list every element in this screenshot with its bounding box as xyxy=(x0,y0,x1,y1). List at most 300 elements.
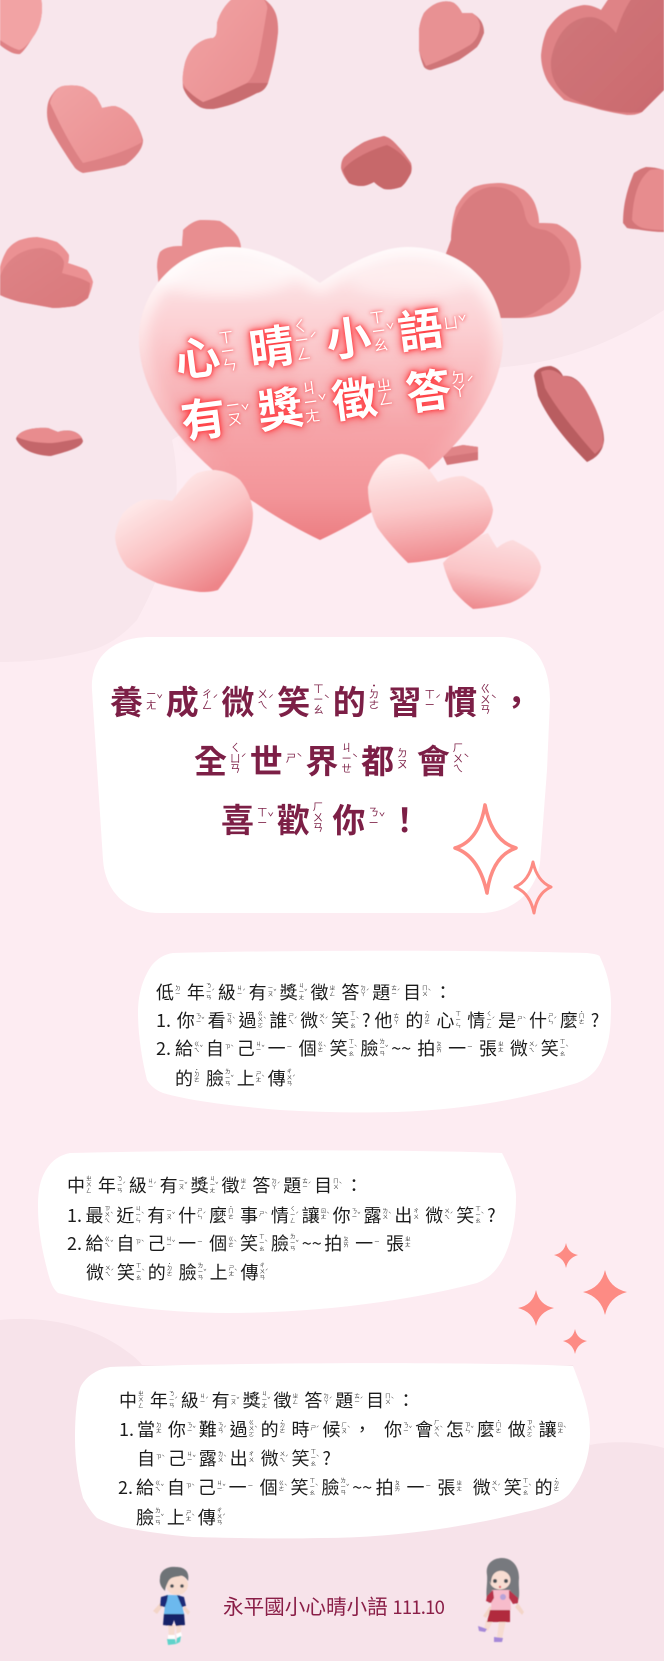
question 2 continued: ˊ xyxy=(292,1073,296,1081)
slogan line 2: ㄉㄡ xyxy=(397,745,408,771)
slogan line 1: ㄒㄧㄠ xyxy=(313,681,324,717)
slogan line 3: ㄋㄧ xyxy=(368,804,379,830)
heading xyxy=(156,979,452,1005)
heart: right edge xyxy=(623,167,664,232)
question 2: ㄍㄜ xyxy=(279,1479,284,1493)
title: 心晴小語有獎徵答: ˇ xyxy=(317,389,328,411)
question 2: ˋ xyxy=(528,1482,532,1490)
slogan line 2: ㄏㄨㄟ xyxy=(453,740,463,776)
question 2: ˋ xyxy=(354,1043,357,1051)
question 1: ˊ xyxy=(294,1015,297,1023)
heading: ˇ xyxy=(304,987,308,995)
heading: ˋ xyxy=(339,1180,342,1188)
heading: 中 xyxy=(119,1387,137,1413)
question 1: ㄌㄨ xyxy=(383,1207,388,1221)
question 2: ˇ xyxy=(161,1482,164,1490)
heart: soft front left xyxy=(115,470,253,592)
heading: ㄊㄧ xyxy=(302,1177,308,1191)
question 2: ㄨㄟ xyxy=(492,1479,497,1493)
question 2: 笑 xyxy=(541,1035,559,1061)
heading: ㄧㄡ xyxy=(231,1392,236,1406)
heading: ： xyxy=(397,1387,415,1413)
question 1: 笑 xyxy=(331,1007,349,1033)
heart: upper left xyxy=(47,85,143,173)
icon: girl character xyxy=(478,1557,524,1642)
question 2: 笑 xyxy=(329,1035,347,1061)
heading: ㄊㄧ xyxy=(391,984,397,998)
question 1: ㄍㄨㄛ xyxy=(257,1009,263,1029)
question 2: ㄧ xyxy=(197,1238,203,1246)
heading: ㄇㄨ xyxy=(333,1177,339,1191)
question 1: ˋ xyxy=(347,1424,350,1432)
question 2: ˇ xyxy=(110,1238,113,1246)
question 2 xyxy=(156,1035,569,1061)
title: 心晴小語有獎徵答: ㄓㄥ xyxy=(375,373,394,410)
heading: ㄋㄧㄢ xyxy=(169,1389,174,1409)
heading: ㄇㄨ xyxy=(385,1392,391,1406)
question 2: 自 xyxy=(206,1035,224,1061)
slogan line 1: ˊ xyxy=(212,692,218,707)
question 1: ˋ xyxy=(265,1210,268,1218)
question 2 continued: 傳 xyxy=(240,1259,258,1285)
question 2: 拍 xyxy=(417,1035,435,1061)
question 2 continued xyxy=(86,1259,268,1285)
question 1: ˊ xyxy=(450,1210,453,1218)
question 2: 微 xyxy=(473,1474,491,1500)
question 1 xyxy=(156,1007,599,1033)
question 2 continued: ˊ xyxy=(222,1512,226,1520)
question 2 continued: ˇ xyxy=(230,1073,234,1081)
icon: outline sparkles xyxy=(453,803,552,914)
question 1 continued: ˊ xyxy=(285,1453,289,1461)
question 1: ㄗㄨㄛ xyxy=(527,1418,532,1438)
question 1: ˋ xyxy=(523,1015,526,1023)
question 2 continued: ㄕㄤ xyxy=(229,1264,234,1278)
question 1: ˋ xyxy=(481,1210,484,1218)
title: 心晴小語有獎徵答: ㄉㄚ xyxy=(449,365,468,402)
question 2: 張 xyxy=(386,1230,404,1256)
heading: ㄉㄚ xyxy=(360,984,366,998)
slogan line 3: 你 xyxy=(332,794,365,842)
heading: 低 xyxy=(156,979,174,1005)
heading: 年 xyxy=(98,1172,116,1198)
question 1: ? xyxy=(591,1007,599,1033)
question 2 continued: 傳 xyxy=(198,1504,216,1530)
heart: behind main xyxy=(157,220,241,300)
question 2: ㄧ xyxy=(248,1482,253,1490)
question 2 continued: ㄌㄧㄢ xyxy=(155,1506,161,1526)
panel: middle grade questions xyxy=(38,1150,516,1313)
question 2: 自 xyxy=(167,1474,185,1500)
question 2: ˇ xyxy=(385,1043,388,1051)
question 1: 微 xyxy=(300,1007,318,1033)
question 2 continued: ㄉㄜ xyxy=(194,1070,200,1084)
slogan line 2: 都 xyxy=(361,735,394,783)
question 1: 的 xyxy=(405,1007,423,1033)
question 2: 微 xyxy=(510,1035,528,1061)
question 2 continued: ㄕㄤ xyxy=(186,1509,192,1523)
question 2: 臉 xyxy=(321,1474,339,1500)
question 2: ˋ xyxy=(230,1043,234,1051)
slogan line 1: ˇ xyxy=(156,692,163,707)
question 2: 一 xyxy=(448,1035,466,1061)
heading: ： xyxy=(345,1172,363,1198)
heading: ㄐㄧㄤ xyxy=(210,1174,215,1194)
question 2: 一 xyxy=(178,1230,196,1256)
heading: 答 xyxy=(252,1172,270,1198)
question 2: 一 xyxy=(355,1230,373,1256)
heading: 徵 xyxy=(221,1172,239,1198)
question 1: 讓 xyxy=(539,1416,557,1442)
question 1: 麼 xyxy=(209,1202,227,1228)
heading: ˊ xyxy=(211,987,215,995)
question 1: ㄇㄜ xyxy=(496,1421,501,1435)
question 1: ㄒㄧㄠ xyxy=(350,1009,356,1029)
title: 心晴小語有獎徵答: 小 xyxy=(322,300,375,370)
question 2: 個 xyxy=(209,1230,227,1256)
title: 心晴小語有獎徵答: ˊ xyxy=(308,327,319,349)
question 2: ㄗ xyxy=(186,1482,192,1490)
question 2: ˇ xyxy=(172,1238,175,1246)
heading: 獎 xyxy=(191,1172,209,1198)
question 2 continued: ˋ xyxy=(261,1073,265,1081)
slogan line 1: 的 xyxy=(333,676,366,724)
question 2 continued: 上 xyxy=(237,1065,255,1091)
question 1: ˋ xyxy=(356,1015,359,1023)
question 2 continued: ˇ xyxy=(161,1512,164,1520)
question 2: 一 xyxy=(407,1474,425,1500)
question 1: 什 xyxy=(178,1202,196,1228)
question 1: 他 xyxy=(375,1007,393,1033)
question 2: ㄐㄧ xyxy=(217,1479,222,1493)
heading: 答 xyxy=(304,1387,322,1413)
slogan line 3: ˇ xyxy=(379,810,385,825)
heading: ㄉㄚ xyxy=(323,1392,329,1406)
slogan line 1: 笑 xyxy=(277,676,310,724)
question 1: ㄍㄨㄛ xyxy=(249,1418,254,1438)
question 1 continued: ㄒㄧㄠ xyxy=(310,1447,316,1467)
question 2: 臉 xyxy=(271,1230,289,1256)
title: 心晴小語有獎徵答: 晴 xyxy=(245,309,298,379)
question 2 continued: ㄌㄧㄢ xyxy=(198,1261,203,1281)
question 1: 你 xyxy=(177,1007,195,1033)
slogan line 1: ㄔㄥ xyxy=(202,686,212,712)
question 2: 己 xyxy=(147,1230,165,1256)
question 1: ˋ xyxy=(563,1424,567,1432)
question 1: ˋ xyxy=(254,1424,258,1432)
question 1 continued: ˋ xyxy=(223,1453,227,1461)
heading: ㄐㄧ xyxy=(148,1177,153,1191)
question 2: ㄍㄟ xyxy=(194,1040,200,1054)
question 1: ㄏㄨㄟ xyxy=(434,1418,440,1438)
heart: dark centre xyxy=(341,136,412,189)
question 2: 拍 xyxy=(324,1230,342,1256)
question 1: ㄑㄧㄥ xyxy=(290,1204,295,1224)
question 1: ㄇㄜ xyxy=(579,1012,584,1026)
question 1: ˇ xyxy=(172,1210,175,1218)
question 2: ㄍㄟ xyxy=(104,1235,110,1249)
heart: soft front right xyxy=(368,454,493,563)
question 2 continued: ˊ xyxy=(111,1267,114,1275)
question 2: ㄒㄧㄠ xyxy=(523,1476,528,1496)
question 1: ㄋㄢ xyxy=(218,1421,223,1435)
heading: ㄓㄥ xyxy=(240,1177,246,1191)
question 2: ˙ xyxy=(555,1475,558,1483)
question 2: ㄉㄜ xyxy=(554,1479,559,1493)
question 1: 是 xyxy=(498,1007,516,1033)
question 1: 過 xyxy=(230,1416,248,1442)
question 1: 的 xyxy=(261,1416,279,1442)
question 1: 看 xyxy=(208,1007,226,1033)
heading: ㄐㄧㄤ xyxy=(299,981,304,1001)
heading: ㄊㄧ xyxy=(354,1392,360,1406)
heading: 級 xyxy=(129,1172,147,1198)
question 2 continued: 的 xyxy=(148,1259,166,1285)
slogan line 2: 會 xyxy=(417,735,450,783)
slogan line 1: ˙ xyxy=(371,678,377,693)
question 1: 你 xyxy=(333,1202,351,1228)
question 1: ㄎㄢ xyxy=(227,1012,232,1026)
question 1 continued: ㄔㄨ xyxy=(249,1450,254,1464)
hero: floating hearts illustration xyxy=(0,0,664,610)
heading: 徵 xyxy=(310,979,328,1005)
heading: 題 xyxy=(283,1172,301,1198)
question 1: ˊ xyxy=(554,1015,557,1023)
question 2 continued: ㄔㄨㄢ xyxy=(217,1506,222,1526)
question 1: ˋ xyxy=(232,1015,236,1023)
question 2: 張 xyxy=(479,1035,497,1061)
question 1: ㄑㄧㄥ xyxy=(486,1009,492,1029)
heading xyxy=(67,1172,363,1198)
title: 心晴小語有獎徵答: 徵 xyxy=(328,361,381,431)
question 1: ㄕ xyxy=(259,1210,265,1218)
slogan line 1: ㄍㄨㄢ xyxy=(480,681,491,717)
slogan line 2: ㄐㄧㄝ xyxy=(341,740,352,776)
heart: large top-right xyxy=(541,0,664,115)
slogan line 2 xyxy=(194,735,470,783)
question 2 continued: ˇ xyxy=(203,1267,207,1275)
question 1: 讓 xyxy=(302,1202,320,1228)
question 2: ㄌㄧㄢ xyxy=(379,1037,385,1057)
question 2: ˋ xyxy=(284,1482,288,1490)
question 2: ㄐㄧ xyxy=(166,1235,172,1249)
question 1: 1. xyxy=(119,1416,134,1442)
slogan line 2: ˋ xyxy=(463,751,470,766)
question 1: 笑 xyxy=(456,1202,474,1228)
question 1: ㄗㄣ xyxy=(465,1421,471,1435)
question 1 continued: ˇ xyxy=(192,1453,196,1461)
slogan line 3: 歡 xyxy=(277,794,310,842)
question 2: ㄒㄧㄠ xyxy=(560,1037,565,1057)
title: 心晴小語有獎徵答: 心 xyxy=(171,320,224,390)
heading: ㄓㄨㄥ xyxy=(138,1389,144,1409)
heading: ˊ xyxy=(308,1180,311,1188)
question 1: 情 xyxy=(467,1007,485,1033)
question 1: ㄖㄤ xyxy=(558,1421,563,1435)
question 1: 過 xyxy=(238,1007,256,1033)
question 2: 給 xyxy=(86,1230,104,1256)
question 2 continued: ㄕㄤ xyxy=(256,1070,261,1084)
title: 心晴小語有獎徵答: ˊ xyxy=(465,371,476,393)
question 1 continued: 自 xyxy=(137,1445,155,1471)
question 1: 事 xyxy=(240,1202,258,1228)
question 1: ˋ xyxy=(141,1210,144,1218)
heading: ˊ xyxy=(174,1395,178,1403)
slogan line 3: ㄒㄧ xyxy=(257,804,268,830)
question 1: 麼 xyxy=(560,1007,578,1033)
question 2 continued: ˋ xyxy=(234,1267,238,1275)
question 1: ㄒㄧㄠ xyxy=(475,1204,481,1224)
question 1: ˊ xyxy=(492,1015,495,1023)
question 2: 一 xyxy=(268,1035,286,1061)
question 2: 給 xyxy=(136,1474,154,1500)
question 2: ㄧ xyxy=(287,1043,292,1051)
question 1: 有 xyxy=(147,1202,165,1228)
title: 心晴小語有獎徵答: ˇ xyxy=(457,310,468,332)
question 2: ˇ xyxy=(261,1043,265,1051)
slogan line 2: 界 xyxy=(305,735,338,783)
question 2: ˇ xyxy=(295,1238,299,1246)
question 2 continued: ˊ xyxy=(265,1267,268,1275)
question 1: ˙ xyxy=(426,1008,429,1016)
title: 心晴小語有獎徵答: 有 xyxy=(177,381,230,451)
slogan line 1: ㄧㄤ xyxy=(146,686,156,712)
question 1: ? xyxy=(487,1202,496,1228)
question 2: ㄧ xyxy=(467,1043,473,1051)
heading: ˊ xyxy=(205,1395,209,1403)
heart: small back right xyxy=(443,533,541,609)
heading: 有 xyxy=(249,979,267,1005)
heading: ㄐㄧ xyxy=(237,984,242,998)
slogan line 1: ˋ xyxy=(491,692,497,707)
slogan line 2: ㄑㄩㄢ xyxy=(230,740,240,776)
slogan line 1: 成 xyxy=(166,676,199,724)
heading: ： xyxy=(434,979,452,1005)
question 2: ˋ xyxy=(265,1238,268,1246)
footer: credit text: 永平國小心晴小語 111.10 xyxy=(223,1590,444,1620)
question 1 xyxy=(119,1416,567,1442)
heading: ㄓㄥ xyxy=(292,1392,298,1406)
question 1: 你 xyxy=(384,1416,402,1442)
title: 心晴小語有獎徵答: ㄑㄧㄥ xyxy=(291,314,312,365)
question 1: ㄋㄧ xyxy=(196,1012,201,1026)
question 2: ˋ xyxy=(315,1482,318,1490)
question 2 xyxy=(67,1230,411,1256)
question 1: 誰 xyxy=(269,1007,287,1033)
question 2 continued: ㄔㄨㄢ xyxy=(259,1261,265,1281)
question 2: 2. xyxy=(118,1474,133,1500)
question 1: 麼 xyxy=(477,1416,495,1442)
heading: 獎 xyxy=(243,1387,261,1413)
heading: ˊ xyxy=(242,987,246,995)
heading: ˇ xyxy=(215,1180,219,1188)
heading: ˊ xyxy=(329,1395,332,1403)
heading: ㄐㄧ xyxy=(200,1392,205,1406)
slogan line 1: 微 xyxy=(221,676,254,724)
question 2 continued: 微 xyxy=(86,1259,104,1285)
question 1 xyxy=(67,1202,496,1228)
heading: ˇ xyxy=(267,1395,271,1403)
question 1: ? xyxy=(362,1007,371,1033)
question 1 continued xyxy=(137,1445,331,1471)
heading: ㄓㄨㄥ xyxy=(86,1174,92,1194)
slogan line 1: ˊ xyxy=(268,692,274,707)
question 1: 露 xyxy=(364,1202,382,1228)
title: 心晴小語有獎徵答 xyxy=(171,292,476,451)
question 2 continued: 臉 xyxy=(179,1259,197,1285)
question 2 continued xyxy=(175,1065,296,1091)
question 1: ㄉㄜ xyxy=(280,1421,285,1435)
question 2: ㄓㄤ xyxy=(456,1479,462,1493)
question 2: 己 xyxy=(237,1035,255,1061)
question 1: ㄗㄨㄟ xyxy=(104,1204,110,1224)
question 2: 笑 xyxy=(504,1474,522,1500)
question 1 continued: 笑 xyxy=(291,1445,309,1471)
question 1: ㄐㄧㄣ xyxy=(135,1204,141,1224)
question 2: 拍 xyxy=(376,1474,394,1500)
slogan line 1: ˊ xyxy=(435,692,441,707)
question 1: ˊ xyxy=(295,1210,299,1218)
question 1: ㄕㄟ xyxy=(288,1012,294,1026)
question 2: ˋ xyxy=(323,1043,327,1051)
question 1: 當 xyxy=(137,1416,155,1442)
question 2: ~~ xyxy=(352,1474,372,1500)
question 1 continued: ㄨㄟ xyxy=(280,1450,285,1464)
question 2: 給 xyxy=(175,1035,193,1061)
heading: ㄋㄧㄢ xyxy=(206,981,212,1001)
question 1 continued: ㄐㄧ xyxy=(187,1450,192,1464)
slogan line 1: ㄨㄟ xyxy=(257,686,268,712)
question 1: 最 xyxy=(86,1202,104,1228)
question 2 continued: ㄌㄧㄢ xyxy=(225,1067,230,1087)
slogan line 1: ， xyxy=(500,676,533,724)
question 2: ˊ xyxy=(534,1043,538,1051)
heart: top-left corner xyxy=(0,0,42,54)
question 1 continued: ˋ xyxy=(316,1453,319,1461)
question 1: ˋ xyxy=(326,1210,330,1218)
question 2: 自 xyxy=(116,1230,134,1256)
title: 心晴小語有獎徵答: ㄐㄧㄤ xyxy=(300,376,321,427)
slogan line 2: ˋ xyxy=(296,751,302,766)
question 2: ㄐㄧ xyxy=(256,1040,261,1054)
question 1: ˊ xyxy=(325,1015,328,1023)
question 2: ㄌㄧㄢ xyxy=(290,1232,295,1252)
heading: 中 xyxy=(67,1172,85,1198)
heading: ˊ xyxy=(397,987,400,995)
question 1: ㄏㄡ xyxy=(341,1421,347,1435)
question 1: ㄕㄣ xyxy=(197,1207,203,1221)
heading: 目 xyxy=(366,1387,384,1413)
question 1: ㄇㄜ xyxy=(228,1207,234,1221)
heart: top centre-right xyxy=(419,1,484,70)
question 1 continued: ㄗ xyxy=(156,1453,162,1461)
question 1: ˇ xyxy=(470,1424,474,1432)
heading: ㄇㄨ xyxy=(422,984,428,998)
slogan line 1: ㄉㄜ xyxy=(369,686,379,712)
question 2 continued: 臉 xyxy=(136,1504,154,1530)
question 2: ㄍㄜ xyxy=(318,1040,323,1054)
question 1 continued: 出 xyxy=(230,1445,248,1471)
question 1 continued: ˋ xyxy=(162,1453,165,1461)
question 2: ㄒㄧㄠ xyxy=(259,1232,265,1252)
question 2: ㄨㄟ xyxy=(529,1040,535,1054)
question 1: ㄊㄚ xyxy=(394,1012,399,1026)
question 1: ˋ xyxy=(388,1210,391,1218)
question 1: ㄨㄟ xyxy=(319,1012,325,1026)
heading: 目 xyxy=(403,979,421,1005)
question 1: ㄕ xyxy=(517,1015,523,1023)
question 1: 微 xyxy=(425,1202,443,1228)
